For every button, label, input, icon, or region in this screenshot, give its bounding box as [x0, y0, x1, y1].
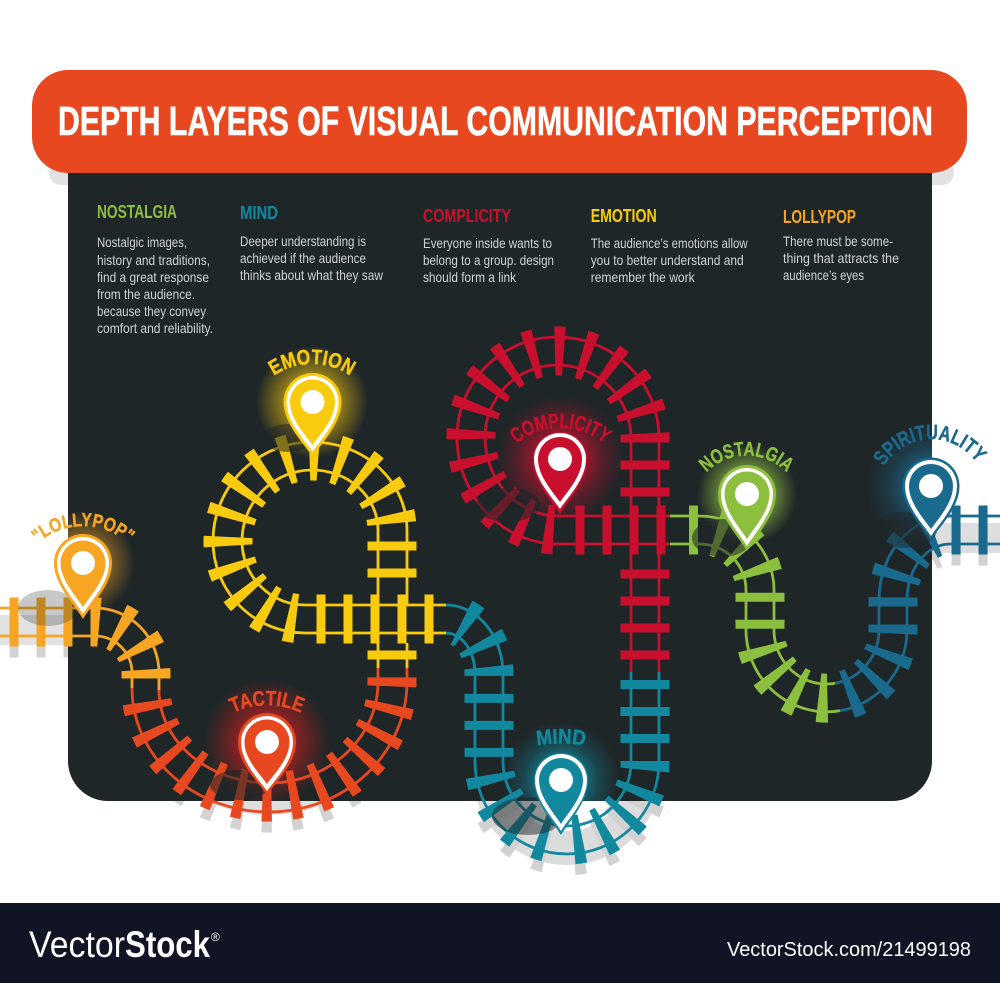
text block: lollypop: LOLLYPOP	[783, 207, 856, 227]
pin: spirituality	[902, 458, 960, 540]
track: lollypop orange section	[0, 608, 159, 690]
pin label: nostalgia: NOSTALGIA	[698, 442, 793, 472]
text block: mind	[240, 203, 384, 283]
track: nostalgia green section	[670, 516, 840, 712]
footer bar	[0, 903, 1000, 983]
track: spirituality blue section	[835, 516, 1000, 711]
text block: mind: MIND	[240, 203, 278, 223]
pin: emotion	[284, 373, 342, 457]
text block: emotion: you to better understand and	[591, 252, 744, 268]
pin label: tactile: TACTILE	[228, 690, 306, 713]
text block: complicity: COMPLICITY	[423, 206, 511, 226]
pin label: spirituality: SPIRITUALITY	[874, 424, 988, 464]
pin label: mind: MIND	[536, 728, 586, 746]
text block: nostalgia: find a great response	[97, 269, 209, 285]
pin: complicity	[533, 432, 587, 514]
footer bar: Stock	[125, 924, 210, 965]
pin label: lollypop: "LOLLYPOP"	[30, 512, 136, 538]
pin: mind	[534, 753, 588, 835]
pin label: complicity: COMPLICITY	[510, 413, 613, 442]
title banner	[32, 70, 967, 173]
text block: mind: thinks about what they saw	[240, 267, 384, 283]
text block: lollypop: audience’s eyes	[783, 267, 864, 283]
track: emotion yellow section	[213, 442, 446, 668]
tie shadows on white background	[0, 541, 1000, 851]
text block: mind: Deeper understanding is	[240, 233, 366, 249]
footer bar: VectorStock.com/21499198	[727, 939, 971, 961]
pin glows	[68, 348, 932, 801]
text block: nostalgia: comfort and reliability.	[97, 320, 213, 336]
text block: emotion: remember the work	[591, 269, 696, 285]
pin: tactile	[238, 713, 296, 795]
text block: nostalgia	[97, 202, 213, 336]
pin: lollypop	[54, 534, 112, 619]
track: complicity red section	[457, 337, 670, 672]
track: mind teal section	[446, 605, 659, 854]
dark panel	[68, 172, 932, 801]
track: tactile red section	[132, 668, 407, 812]
text block: complicity: should form a link	[423, 269, 517, 285]
text block: complicity	[423, 206, 554, 285]
pin shadows	[18, 424, 937, 835]
track shadows on white background	[0, 538, 1000, 848]
text block: lollypop: thing that attracts the	[783, 250, 899, 266]
pin label: emotion: EMOTION	[267, 349, 356, 376]
text block: complicity: belong to a group. design	[423, 252, 554, 268]
footer bar: ®	[211, 930, 220, 944]
text block: nostalgia: because they convey	[97, 303, 206, 319]
text block: emotion: The audience’s emotions allow	[591, 235, 748, 251]
text block: lollypop	[783, 207, 899, 283]
text block: emotion: EMOTION	[591, 206, 657, 226]
text block: nostalgia: history and traditions,	[97, 252, 210, 268]
text block: nostalgia: from the audience.	[97, 286, 195, 302]
text block: emotion	[591, 206, 748, 285]
text block: mind: achieved if the audience	[240, 250, 366, 266]
pin: nostalgia	[718, 465, 776, 551]
header shadow	[49, 160, 954, 185]
footer bar: Vector	[29, 924, 125, 965]
text block: nostalgia: Nostalgic images,	[97, 234, 187, 250]
text block: lollypop: There must be some-	[783, 233, 893, 249]
text block: nostalgia: NOSTALGIA	[97, 202, 177, 222]
text block: complicity: Everyone inside wants to	[423, 235, 552, 251]
